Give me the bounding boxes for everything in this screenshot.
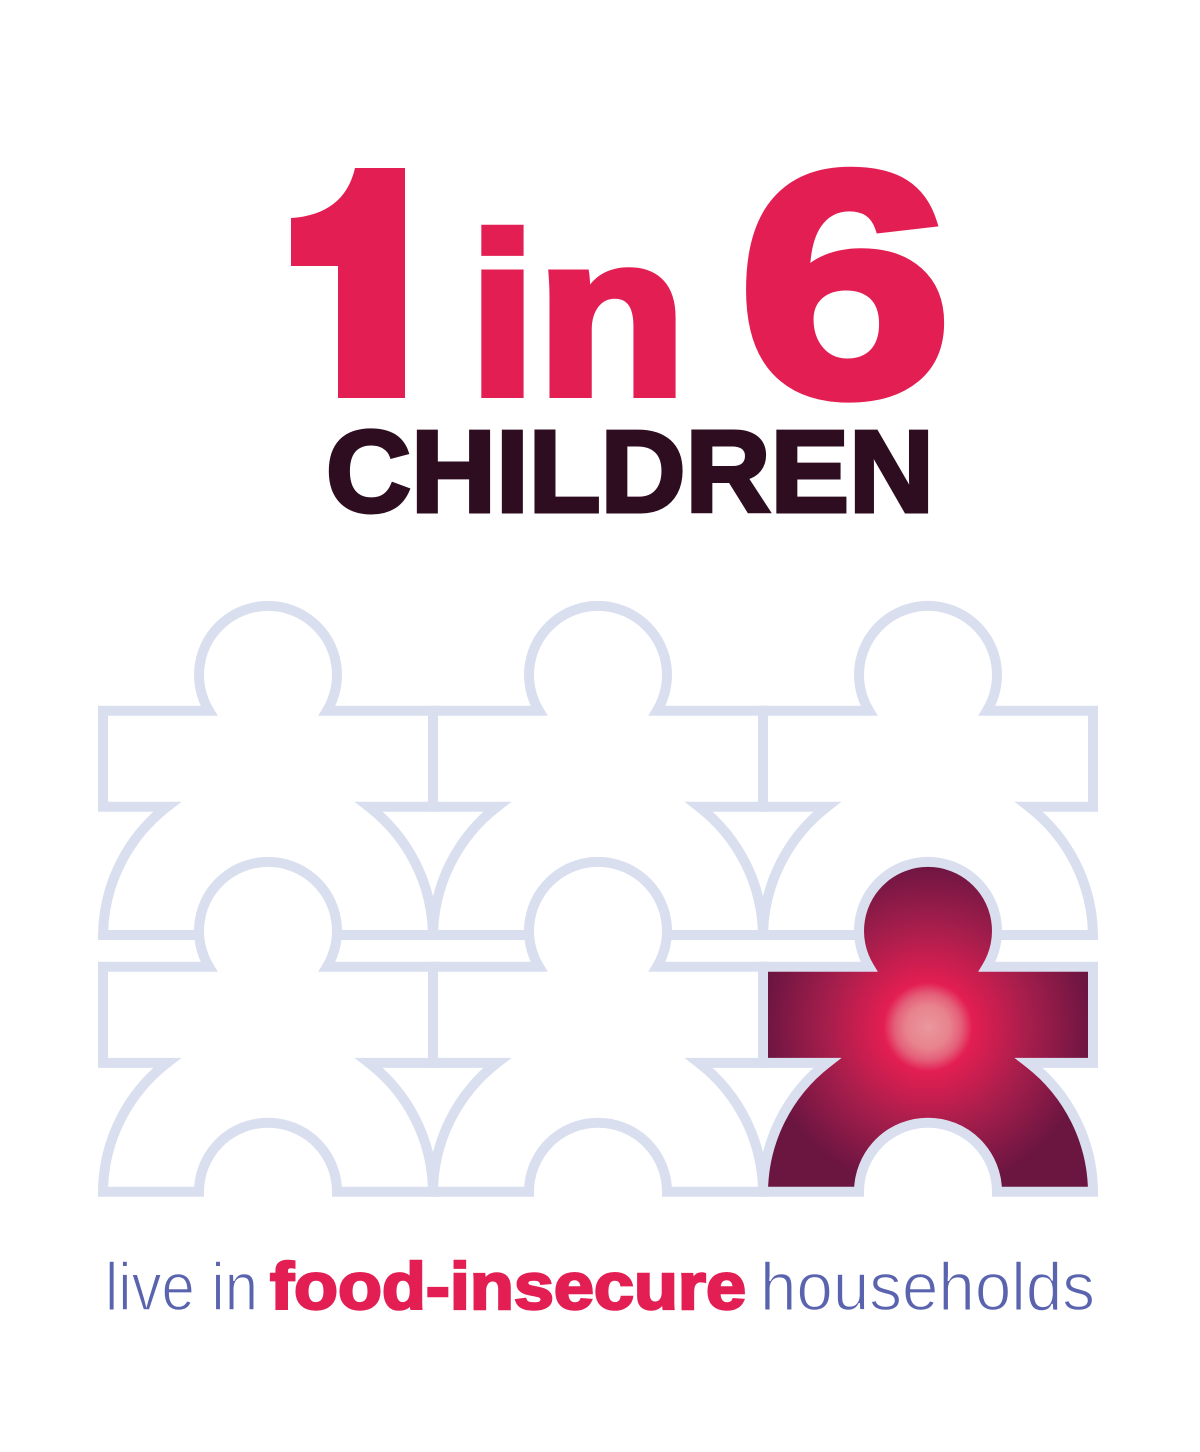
figure: top left	[103, 606, 433, 935]
tagline: live in: live in	[105, 1249, 258, 1325]
figure: top right	[763, 606, 1093, 935]
word: in: in	[468, 189, 686, 443]
tagline	[105, 1249, 1095, 1325]
numeral 1: 1	[288, 104, 438, 468]
tagline: households: households	[760, 1249, 1095, 1325]
figure: top centre	[433, 606, 763, 935]
headline: 1 in 6	[291, 166, 944, 403]
tagline: food-insecure: food-insecure	[270, 1249, 746, 1323]
figure: bottom centre	[433, 862, 763, 1192]
figure: bottom left	[103, 862, 433, 1192]
numeral 6: 6	[738, 106, 952, 462]
pictogram: six linked figures	[103, 606, 1093, 1192]
figure: highlighted child with glowing gradient	[763, 862, 1093, 1192]
subheading: children: CHILDREN	[326, 406, 934, 536]
